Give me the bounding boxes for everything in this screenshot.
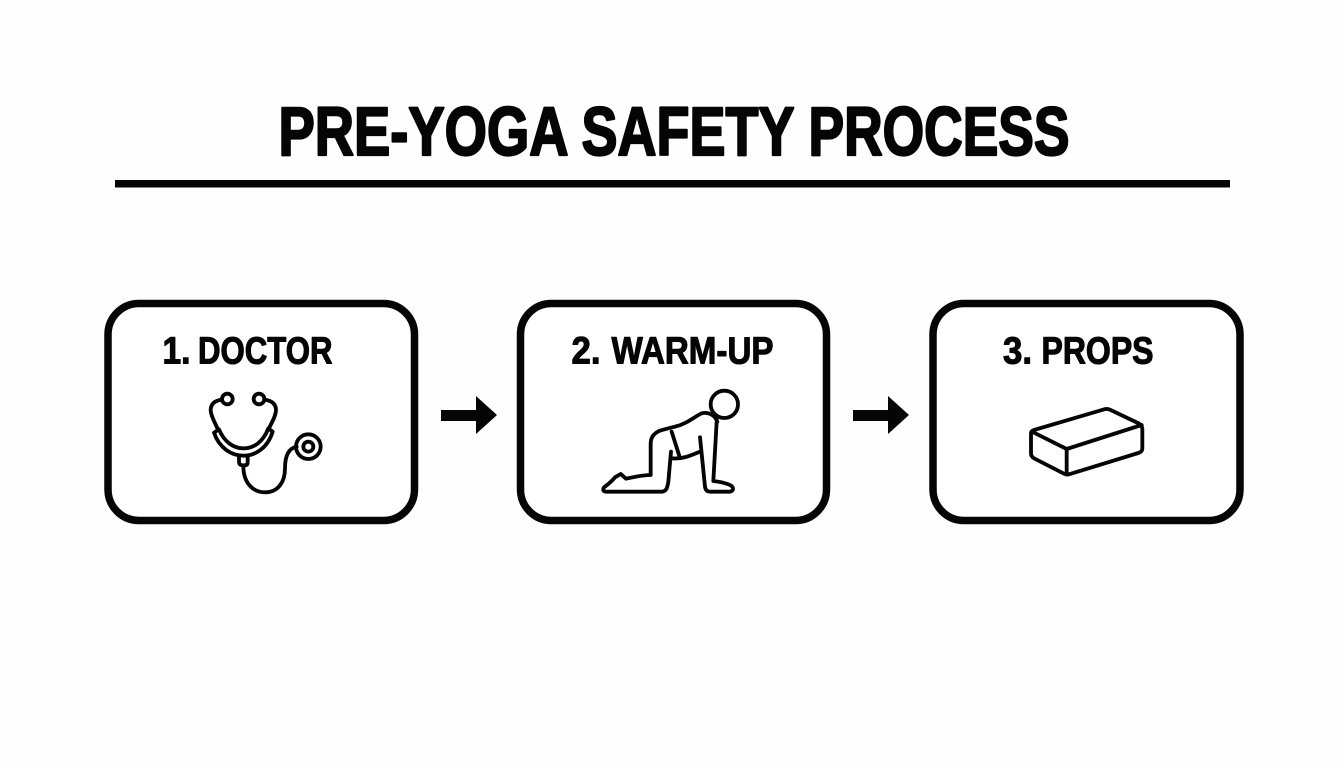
title: SAFETY xyxy=(582,93,794,170)
heading: 2. WARM-UP: 2. xyxy=(572,330,600,372)
heading: 1. DOCTOR: DOCTOR xyxy=(198,330,332,372)
panel frame: props xyxy=(933,304,1240,520)
icon: person on hands and knees xyxy=(603,391,738,492)
title rule xyxy=(115,180,1230,188)
panel frame: doctor xyxy=(108,304,414,520)
icon: stethoscope xyxy=(211,394,321,492)
arrow: doctor to warm-up xyxy=(441,396,497,434)
heading: 3. PROPS: PROPS xyxy=(1042,330,1154,372)
heading: 3. PROPS: 3. xyxy=(1003,330,1032,372)
icon: yoga block xyxy=(1031,409,1142,475)
heading: 1. DOCTOR: 1. xyxy=(162,330,190,372)
panel: step 3 props xyxy=(933,304,1240,520)
title: PRE-YOGA xyxy=(278,93,568,170)
panel: step 2 warm-up xyxy=(520,304,826,520)
panel: step 1 doctor xyxy=(108,304,414,520)
title: PROCESS xyxy=(808,93,1070,170)
panel frame: warm-up xyxy=(520,304,826,520)
arrow: warm-up to props xyxy=(853,396,909,434)
heading: 2. WARM-UP: WARM-UP xyxy=(612,330,774,372)
